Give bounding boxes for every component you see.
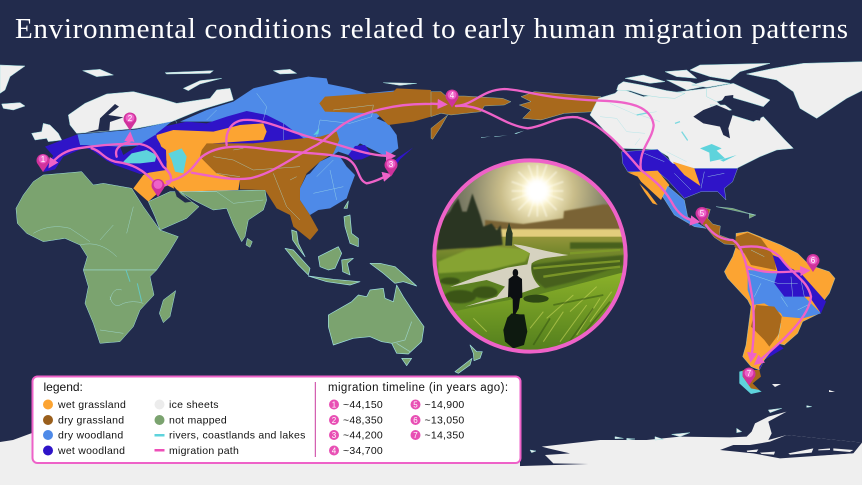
walking figure [508, 269, 522, 314]
US rivers [644, 153, 724, 190]
pin 1 [37, 154, 50, 172]
Weddell sea [720, 435, 862, 458]
map: South East Asia and Oceania [285, 201, 482, 373]
left mounds [440, 277, 498, 303]
map: Beringia [431, 92, 601, 139]
left meadow highlights [438, 247, 532, 273]
legend item: wet grassland: wet grassland [57, 399, 126, 411]
dry woodland: southern Mexico [663, 186, 706, 228]
path: through South America [706, 225, 811, 363]
wet woodland: central Eurasia [135, 111, 305, 170]
Australian rivers [392, 322, 412, 352]
small tuft [523, 295, 549, 303]
Great Lakes [700, 144, 737, 162]
ice sheets: Greenland [747, 62, 862, 118]
not mapped: Australia [328, 285, 424, 354]
timeline 2: 2 [332, 416, 337, 425]
dry grassland: north-east Siberia [319, 88, 431, 125]
dry woodland: China [300, 155, 355, 215]
ice sheets: North American mainland [590, 88, 793, 168]
not mapped: Malay peninsula [292, 230, 305, 257]
not mapped: Taiwan [344, 201, 348, 208]
wet woodland: southern cone [759, 343, 784, 370]
legend heading: legend: [44, 380, 83, 394]
map: Africa, Europe and Asia [0, 65, 431, 270]
Arctic channel [720, 95, 733, 105]
ice sheets: Arctic islands [0, 65, 417, 110]
not mapped: Caribbean islands [716, 207, 756, 218]
timeline 1: ~44,150 [343, 399, 383, 411]
not mapped: southern Africa [83, 270, 157, 343]
rivers [33, 93, 373, 257]
pin 3: 3 [389, 160, 394, 169]
pin 2 [124, 113, 136, 130]
ice sheet west of the legend [0, 430, 40, 485]
timeline 4: 4 [332, 446, 337, 456]
pin: origin in the Middle East [152, 179, 164, 197]
timeline 6: ~13,050 [424, 414, 464, 426]
wet woodland: Korea and Japan [348, 145, 372, 160]
pin 4: 4 [450, 91, 455, 100]
south Atlantic islands [772, 384, 835, 392]
wet grassland: Baja California [639, 183, 658, 205]
pin 4 [446, 90, 458, 108]
not mapped: Arabia [148, 192, 199, 230]
legend item: ice sheets: ice sheets [169, 399, 219, 411]
not mapped: Borneo [318, 247, 342, 270]
not mapped: New Zealand north [470, 345, 482, 361]
map: Europe [32, 88, 233, 174]
not mapped: Sri Lanka [246, 238, 252, 247]
map: United States and Mexico [622, 149, 738, 228]
stream [450, 244, 568, 307]
legend item: not mapped: not mapped [169, 414, 227, 426]
pin 1: 1 [41, 155, 46, 164]
timeline 2: ~48,350 [343, 414, 383, 426]
map: Central and South America [700, 207, 835, 394]
pin 7 [742, 368, 756, 386]
migration paths [50, 89, 811, 363]
not mapped: India [180, 190, 267, 242]
not mapped: Sumatra [285, 248, 310, 275]
legend item: dry grassland: dry grassland [58, 414, 124, 426]
Hudson Strait [732, 110, 762, 121]
Baltic sea [85, 104, 123, 133]
ice sheets: Antarctica [0, 406, 862, 485]
Black Sea [123, 150, 157, 163]
Weddell shelf ice [747, 448, 862, 459]
timeline 5: 5 [413, 400, 418, 410]
distant hills [485, 204, 627, 232]
not mapped: New Zealand south [455, 358, 472, 373]
lakes [313, 128, 319, 135]
sky and sun [438, 162, 608, 236]
dry woodland: Siberia [180, 77, 400, 157]
not mapped: Sulawesi [342, 258, 353, 275]
Caspian Sea [168, 148, 187, 173]
path: Eurasia [50, 104, 431, 186]
dry grassland: Patagonia [743, 370, 761, 390]
title: Environmental conditions related to early human migration patterns [15, 13, 848, 45]
not mapped: Madagascar [159, 291, 176, 323]
timeline 6: 6 [413, 416, 418, 425]
legend item: wet woodland: wet woodland [57, 445, 125, 457]
lakes and rivers [600, 103, 687, 163]
dry grassland: Chukotka [431, 92, 511, 117]
wet woodland: United States [622, 149, 738, 200]
not mapped: Africa [16, 172, 178, 270]
map: North American ice [590, 62, 862, 168]
not mapped: Tasmania [402, 358, 412, 366]
wet grassland: Middle East and Central Asia [133, 123, 267, 202]
timeline 7: 7 [413, 431, 418, 440]
bright grass strokes [473, 287, 612, 342]
not mapped: Java [308, 276, 360, 285]
ice sheets: Baffin and Arctic islands [617, 63, 770, 112]
walker's dark reflection [503, 313, 527, 348]
timeline 4: ~34,700 [343, 445, 383, 457]
meadow [436, 236, 624, 312]
tree line [437, 193, 503, 250]
not mapped: Philippines [344, 215, 358, 247]
timeline divider [315, 382, 316, 457]
sun glow [525, 178, 550, 204]
dark grass strokes [533, 295, 610, 345]
ice sheet under the legend [30, 458, 520, 485]
right marsh [530, 242, 623, 288]
wet grassland: South America [724, 232, 835, 370]
wet woodland: Amazon [773, 255, 826, 313]
rivers [100, 270, 143, 333]
main ice sheet [510, 406, 862, 485]
path: across Beringia and North America [431, 89, 698, 222]
photo frame [434, 160, 626, 352]
right marsh highlights [533, 250, 620, 277]
timeline 7: ~14,350 [424, 430, 464, 442]
dry woodland: Amazon south [748, 270, 821, 318]
sunlit haze [495, 228, 622, 237]
Aleutian islands [481, 131, 524, 138]
rivers [748, 250, 811, 340]
not mapped: New Guinea [370, 263, 417, 286]
wet grassland: Mexico [628, 171, 669, 200]
dry grassland: Kamchatka [431, 115, 448, 139]
legend item: rivers, coastlands and lakes: rivers, coastlands and lakes [169, 430, 306, 442]
pin 3 [385, 159, 397, 176]
timeline 1: 1 [332, 400, 337, 410]
map: southern Africa and Madagascar [83, 270, 176, 343]
Hudson Bay [693, 105, 733, 138]
timeline 3: ~44,200 [343, 430, 383, 442]
timeline 5: ~14,900 [424, 399, 464, 411]
foreground grass [454, 272, 622, 350]
timeline heading: migration timeline (in years ago): [328, 382, 508, 394]
pin 6: 6 [811, 256, 816, 265]
dry grassland: northern South America [734, 233, 776, 270]
dry grassland: Central America [700, 208, 736, 245]
legend item: migration path: migration path [169, 445, 239, 457]
peninsula islands [530, 406, 812, 453]
pin 7: 7 [747, 369, 752, 378]
legend item: dry woodland: dry woodland [58, 430, 123, 442]
dry grassland: Gran Chaco [751, 305, 782, 347]
ice sheets: northern Europe [68, 88, 233, 133]
wet woodland: southern Europe [43, 134, 167, 174]
pin 5 [696, 207, 708, 225]
wet grassland: Great Plains [673, 162, 700, 186]
pin 2: 2 [128, 114, 133, 123]
pin 6 [806, 254, 820, 272]
dry grassland: Central and South Asia [200, 132, 339, 240]
dry grassland: Alaska [519, 92, 601, 120]
legend panel [32, 376, 520, 463]
dry woodland: Patagonia coast [739, 370, 762, 394]
dry woodland: Europe [77, 122, 172, 147]
pin 5: 5 [700, 209, 705, 218]
sun rays [512, 165, 563, 217]
Persian Gulf [173, 186, 192, 203]
photo: person walking in a sunlit meadow [430, 158, 630, 358]
timeline 3: 3 [332, 431, 337, 440]
ice sheets: Britain [32, 123, 62, 142]
lone tree [505, 223, 513, 246]
